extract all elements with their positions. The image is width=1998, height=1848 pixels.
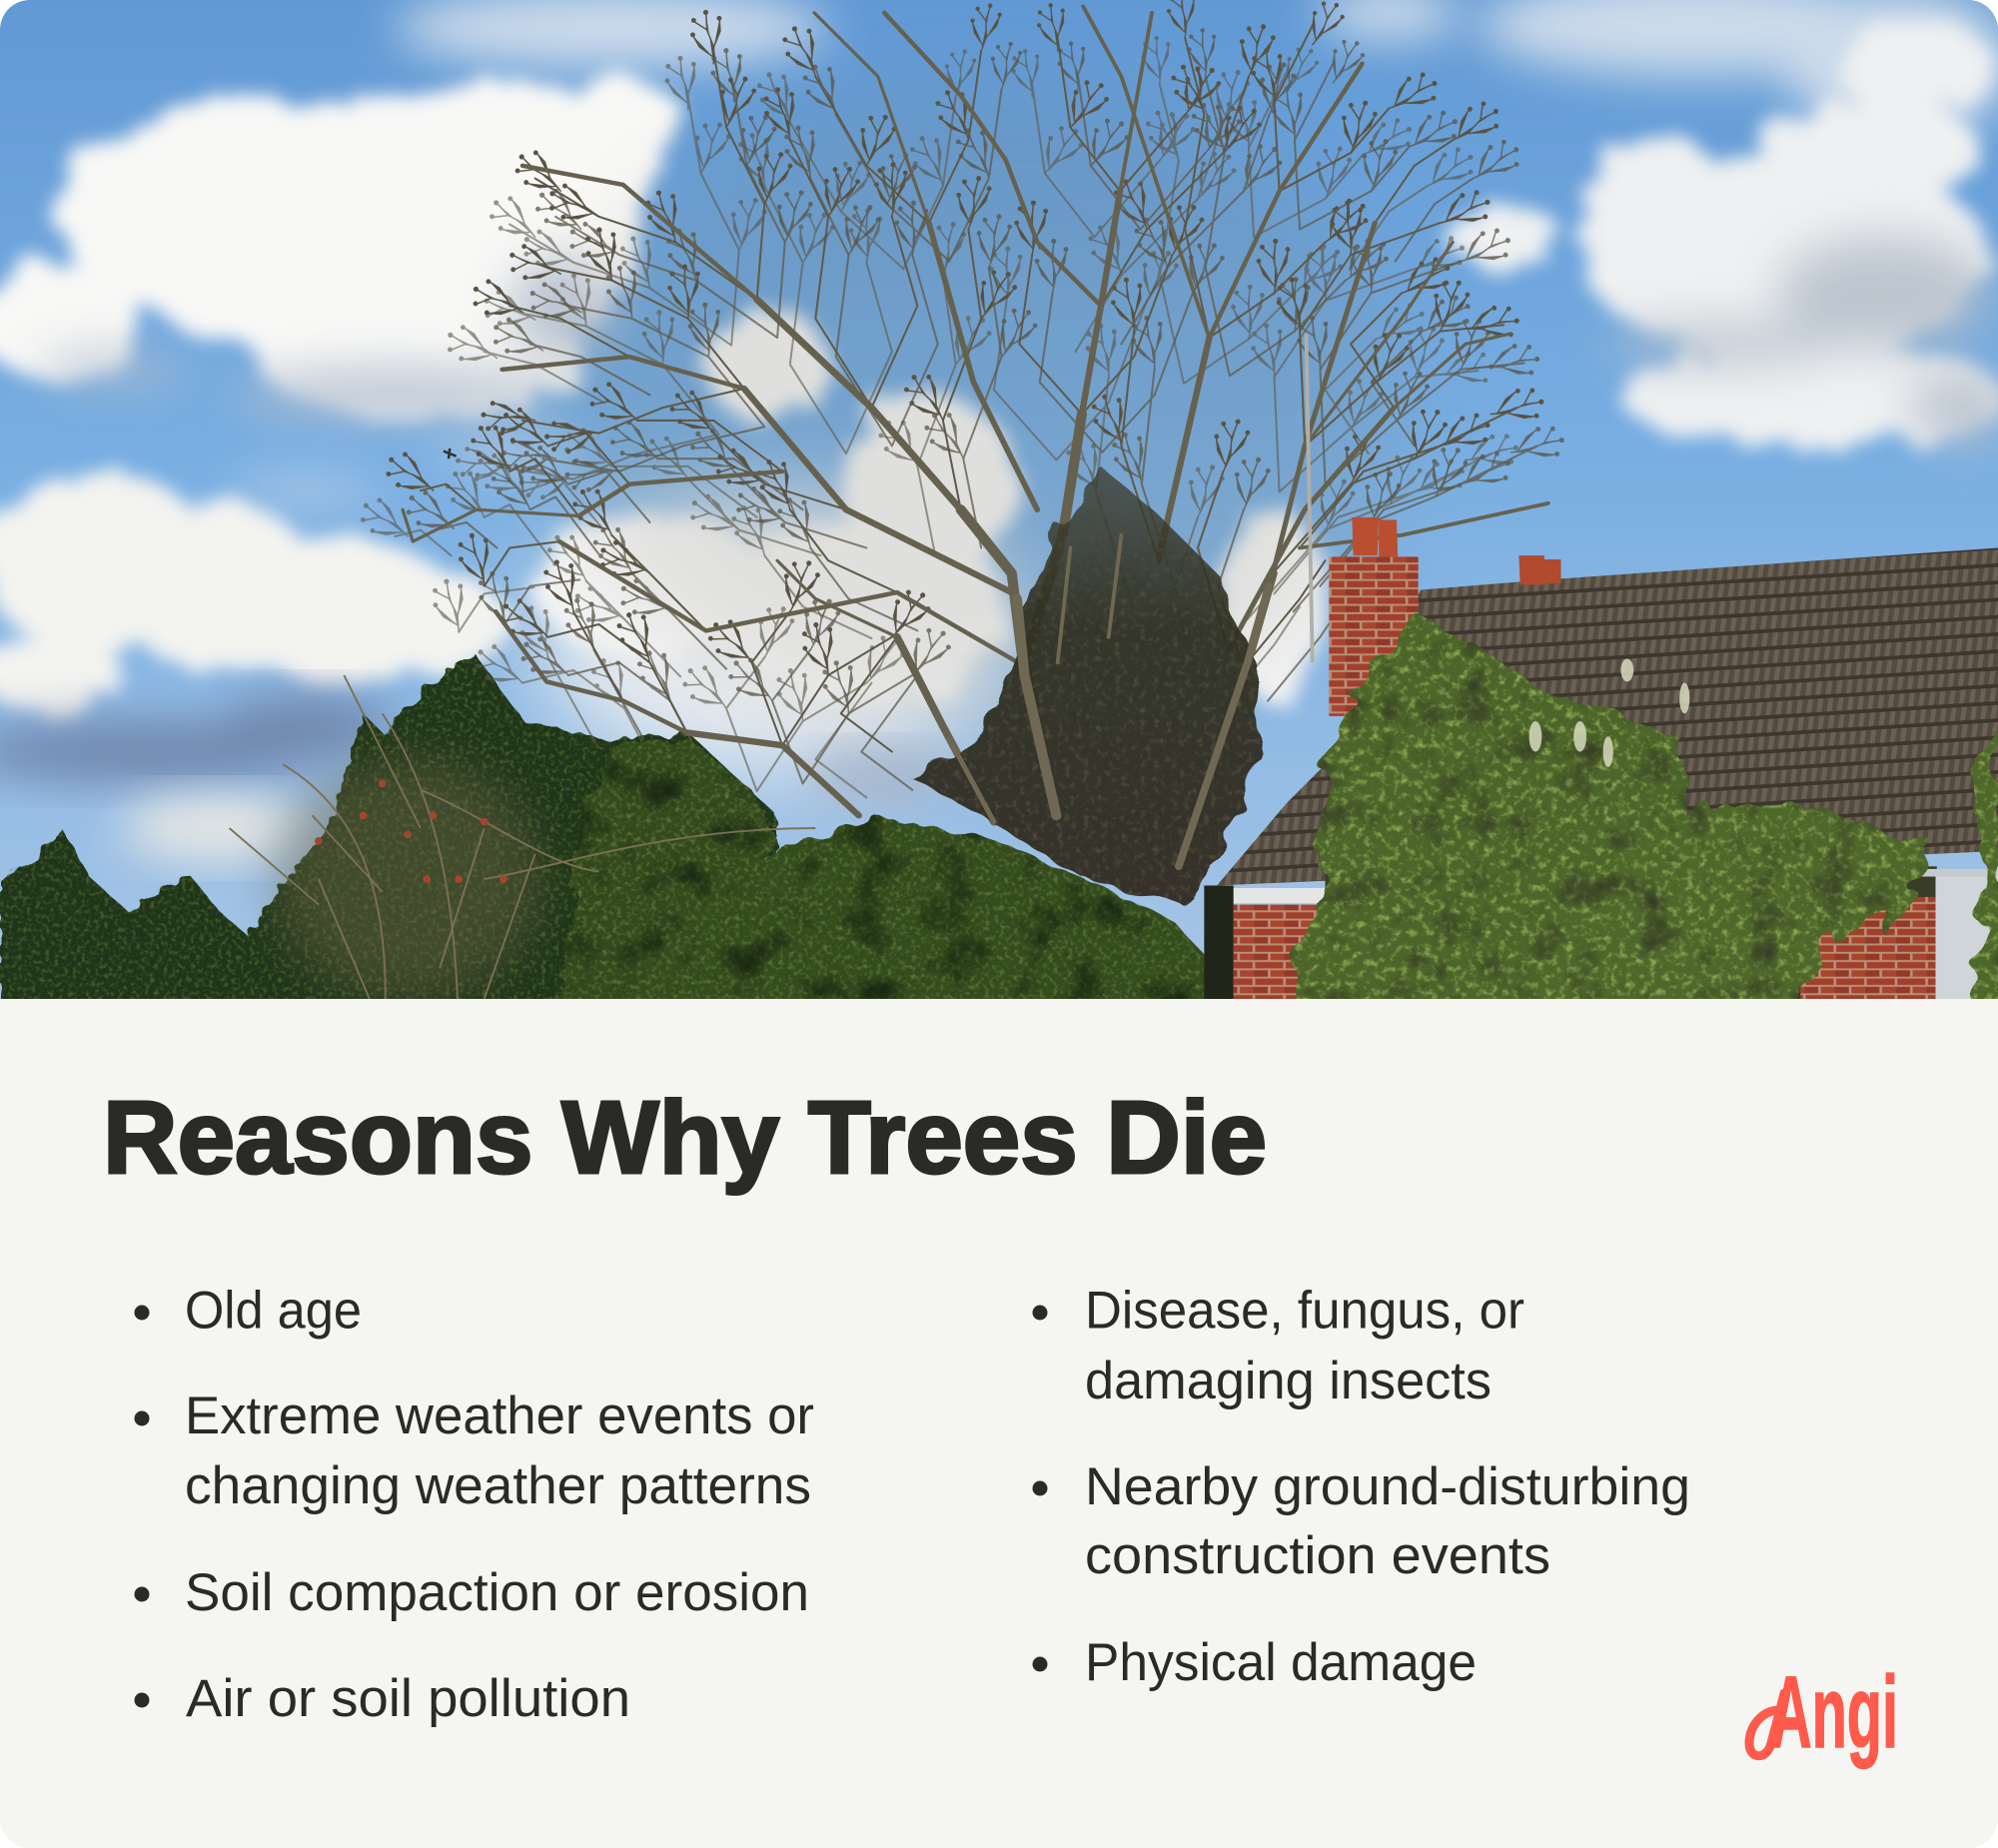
- logo: Angi: [1749, 1655, 1898, 1769]
- white fascia board: [1217, 888, 1357, 903]
- bullet: extreme weather: Extreme weather events or: [185, 1386, 814, 1445]
- list: right column: [1033, 1281, 1690, 1692]
- leafy bush in front of house: [1290, 611, 1998, 1019]
- panel: text area: [103, 1080, 1898, 1770]
- white window right: [1936, 877, 1998, 999]
- green hedge: [611, 815, 1217, 1058]
- crown haze: [560, 89, 1402, 726]
- white windows centre: [1373, 930, 1795, 999]
- bullet: extreme weather: [134, 1386, 814, 1515]
- logo: Angi: Angi: [1770, 1655, 1898, 1769]
- brick wall right: [1800, 897, 1936, 999]
- bullet: old age: Old age: [185, 1281, 362, 1341]
- panel background: [0, 999, 1998, 1848]
- bare reddish tree over evergreens: [230, 675, 815, 1058]
- bullet: construction: construction events: [1085, 1526, 1550, 1585]
- extra twig layer two: [355, 34, 1522, 797]
- bullet: construction: [1033, 1457, 1690, 1585]
- bullet: extreme weather: changing weather patterns: [185, 1456, 811, 1515]
- bird: [444, 449, 457, 459]
- photo: bare dying tree beside a brick house under a cloudy sky: [0, 0, 1998, 999]
- secondary branches and twigs: [380, 0, 1547, 752]
- clouds: [0, 0, 1998, 861]
- dark gap beside wall: [1204, 885, 1234, 999]
- limbs over ivy: [949, 535, 1269, 866]
- bullet: disease: Disease, fungus, or: [1085, 1281, 1524, 1341]
- chimney pots: [1352, 517, 1398, 556]
- blossom spikes: [1529, 658, 1689, 767]
- chimney: [1329, 556, 1419, 716]
- roof: [1217, 547, 1998, 885]
- house: [1204, 517, 1998, 999]
- bullet: soil: Soil compaction or erosion: [185, 1563, 809, 1622]
- antenna mast: [1306, 334, 1313, 662]
- bullet: disease: damaging insects: [1085, 1352, 1492, 1410]
- title: Reasons Why Trees Die: [103, 1080, 1267, 1195]
- sky: [0, 0, 1998, 999]
- white soffit right: [1835, 869, 1998, 877]
- rear chimney pots: [1518, 555, 1560, 584]
- bullet: disease: [1033, 1281, 1524, 1410]
- green bush behind hedge left: [560, 739, 777, 1007]
- bullet: pollution: Air or soil pollution: [186, 1669, 630, 1728]
- dead tree: [355, 0, 1568, 854]
- list: left column: [134, 1281, 814, 1728]
- brick wall left: [1234, 905, 1323, 999]
- background evergreen trees: [0, 656, 777, 1058]
- extra twig layer one: [401, 27, 1568, 790]
- ivy-covered central mass: [911, 471, 1262, 907]
- main limbs: [403, 6, 1548, 854]
- bullet: construction: Nearby ground-disturbing: [1085, 1457, 1690, 1516]
- bullet: physical damage: Physical damage: [1085, 1633, 1477, 1692]
- dark under-eave wall: [1326, 866, 1937, 999]
